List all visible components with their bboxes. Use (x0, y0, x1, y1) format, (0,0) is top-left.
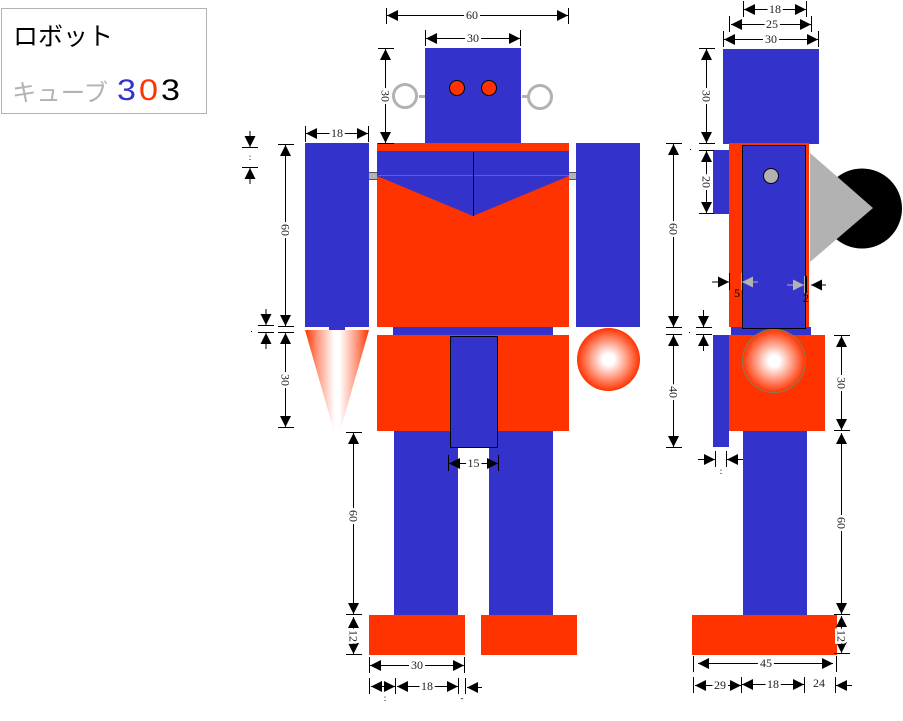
dimension: side 30 (724, 31, 818, 47)
dimension: front width 60: 60 (466, 8, 478, 22)
dimension: side waist gap (689, 310, 712, 351)
dimension: foot offsets front: - (460, 693, 464, 703)
dimension: shoulder offset: : (249, 152, 251, 162)
side arm lower (713, 335, 729, 447)
front legs (394, 431, 553, 615)
dimension: side 18 (744, 1, 806, 17)
dimension: arm gap (251, 309, 274, 349)
dimension: side 30: 30 (765, 32, 777, 46)
dimension: side lower arm 40 (666, 334, 682, 448)
dimension: side foot 12 (834, 616, 850, 654)
dimension: leg height 60 (346, 432, 362, 614)
dimension: arm width 18: 18 (331, 126, 343, 140)
front ears (394, 84, 552, 108)
dimension: front head width 30: 30 (467, 31, 479, 45)
dimension: side foot 12: 12 (834, 630, 848, 642)
subtitle: cube 303 (12, 74, 180, 107)
dimension: side arm thickness (698, 451, 743, 476)
dimension: arm height 60 (278, 144, 294, 326)
dimension: arm height 60: 60 (278, 224, 292, 236)
dimension: arm width 18 (306, 126, 368, 142)
side back panel (742, 146, 806, 328)
dimension: cone height 30: 30 (278, 374, 292, 386)
dimension: side foot offsets: 29 (714, 678, 726, 692)
dimension: side head height 30 (699, 48, 715, 144)
dimension: front head width 30 (426, 30, 520, 46)
side view robot (692, 49, 902, 655)
dimension: foot width 30: 30 (411, 658, 423, 672)
dimension: panel width 15: 15 (468, 456, 480, 470)
dimension: foot height 12 front: 12 (346, 630, 360, 642)
subtitle: cube 303: 3 (161, 74, 180, 107)
side head (723, 49, 819, 144)
side foot (692, 615, 837, 655)
front waist (393, 327, 553, 335)
front hips (377, 335, 569, 431)
side leg (743, 431, 807, 615)
side arm upper (713, 150, 729, 214)
dimension: side hips 30: 30 (834, 377, 848, 389)
title: robot: ロボット (13, 23, 113, 51)
front torso (377, 143, 569, 327)
dimension: side 18: 18 (769, 2, 781, 16)
dimension: side foot offsets: 18 (767, 677, 779, 691)
dimension: side hips 30 (834, 336, 850, 430)
dimension: side foot offsets: 24 (813, 676, 825, 690)
side grey button (764, 168, 778, 184)
subtitle: cube 303: キューブ (12, 80, 108, 107)
shoulder connectors (368, 172, 576, 180)
dimension: side leg 60: 60 (834, 517, 848, 529)
front left arm (305, 143, 369, 330)
dimension: foot offsets front: : (384, 693, 386, 703)
front centre panel (450, 336, 498, 448)
side torso (729, 143, 809, 327)
dimension: leg height 60: 60 (346, 510, 360, 522)
dimension: shoulder offset (242, 131, 258, 184)
dimension: side arm height 20 (690, 149, 714, 214)
dimension: foot height 12 front (346, 617, 362, 654)
dimension: side foot offsets (694, 676, 852, 693)
dimension: front head height 30 (378, 48, 394, 144)
side energy ball (742, 330, 806, 392)
dimension: foot width 30 (370, 657, 464, 673)
thruster cone (305, 330, 369, 442)
side waist (731, 327, 811, 335)
title box (2, 8, 206, 114)
subtitle: cube 303: 3 (117, 74, 136, 107)
dimension: side 25: 25 (766, 17, 778, 31)
dimension: side arm height 20: 20 (700, 176, 714, 188)
dimension: cone height 30 (278, 332, 294, 428)
dimension: side foot 45 (694, 656, 836, 672)
side jet: black disc (822, 168, 902, 248)
dimension: side 2 (787, 276, 826, 305)
dimension: side head height 30: 30 (700, 90, 714, 102)
dimension: side 5: 5 (734, 286, 740, 300)
dimension: side torso height 60: 60 (666, 223, 680, 235)
front head (425, 48, 521, 143)
dimension: side 5 (712, 273, 758, 300)
side jet: grey cone (810, 153, 873, 262)
dimension: panel width 15 (448, 455, 498, 471)
side hips (729, 335, 825, 431)
front right arm (576, 143, 640, 327)
dimension: side arm thickness: : (720, 466, 722, 476)
front feet (369, 615, 577, 655)
dimension: side 25 (730, 16, 812, 32)
dimension: side torso height 60 (666, 144, 682, 328)
dimension: side 2: 2 (803, 291, 809, 305)
dimension: foot offsets front (370, 678, 482, 703)
dimension: side lower arm 40: 40 (666, 386, 680, 398)
dimension: foot offsets front: 18 (421, 679, 433, 693)
front view robot (305, 48, 640, 655)
subtitle: cube 303: 0 (139, 74, 158, 107)
dimension: front head height 30: 30 (378, 90, 392, 102)
dimension: side foot 45: 45 (760, 656, 772, 670)
front energy ball (577, 328, 640, 391)
dimension: front width 60 (386, 8, 568, 24)
